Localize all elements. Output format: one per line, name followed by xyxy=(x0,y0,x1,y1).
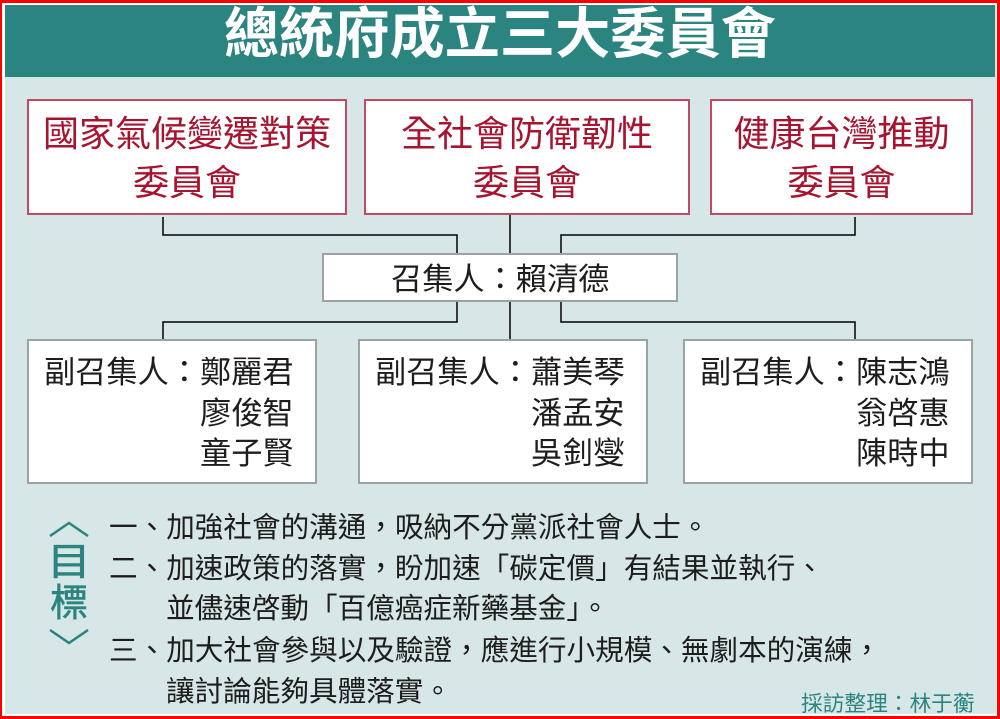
goals label xyxy=(47,522,91,644)
deputy name: 童子賢 xyxy=(200,428,294,473)
goals heading character: 標 xyxy=(50,572,88,627)
panel: convener xyxy=(322,253,678,302)
icon: top chevron xyxy=(49,522,89,537)
deputy name: 翁啓惠 xyxy=(856,388,950,433)
deputy name: 陳時中 xyxy=(856,428,950,473)
credit: 採訪整理：林于蘅 xyxy=(801,687,975,718)
panel: deputy conveners 3 xyxy=(683,339,973,484)
deputy name: 潘孟安 xyxy=(531,388,625,433)
deputy name: 廖俊智 xyxy=(200,388,294,433)
goal one: 一、加強社會的溝通，吸納不分黨派社會人士。 xyxy=(109,505,709,546)
panel: deputy conveners 1 xyxy=(27,339,317,484)
panel: healthy Taiwan committee xyxy=(710,99,973,215)
panel: deputy conveners 2 xyxy=(358,339,648,484)
goal two: 二、加速政策的落實，盼加速「碳定價」有結果並執行、 xyxy=(109,546,824,587)
panel: climate committee xyxy=(27,99,347,215)
committee suffix: 委員會 xyxy=(133,154,241,206)
committee suffix: 委員會 xyxy=(473,154,581,206)
committee name: 全社會防衛韌性 xyxy=(401,105,653,157)
convener name: 召集人：賴清德 xyxy=(391,254,609,299)
committee name: 健康台灣推動 xyxy=(733,105,950,157)
committee name: 國家氣候變遷對策 xyxy=(43,105,331,157)
goal two continued: 並儘速啓動「百億癌症新藥基金」。 xyxy=(166,586,609,627)
goal three continued: 讓討論能夠具體落實。 xyxy=(166,669,452,710)
committee suffix: 委員會 xyxy=(787,154,896,206)
panel: resilience committee xyxy=(364,99,690,215)
title banner xyxy=(5,5,995,77)
goals heading character: 目 xyxy=(47,531,91,586)
goal three: 三、加大社會參與以及驗證，應進行小規模、無劇本的演練， xyxy=(109,628,881,669)
deputy label and name: 副召集人：鄭麗君 xyxy=(44,347,294,392)
deputy label and name: 副召集人：陳志鴻 xyxy=(700,347,950,392)
deputy label and name: 副召集人：蕭美琴 xyxy=(375,347,625,392)
goals list xyxy=(109,505,881,710)
deputy name: 吳釗燮 xyxy=(531,428,625,473)
icon: bottom chevron xyxy=(49,629,89,644)
